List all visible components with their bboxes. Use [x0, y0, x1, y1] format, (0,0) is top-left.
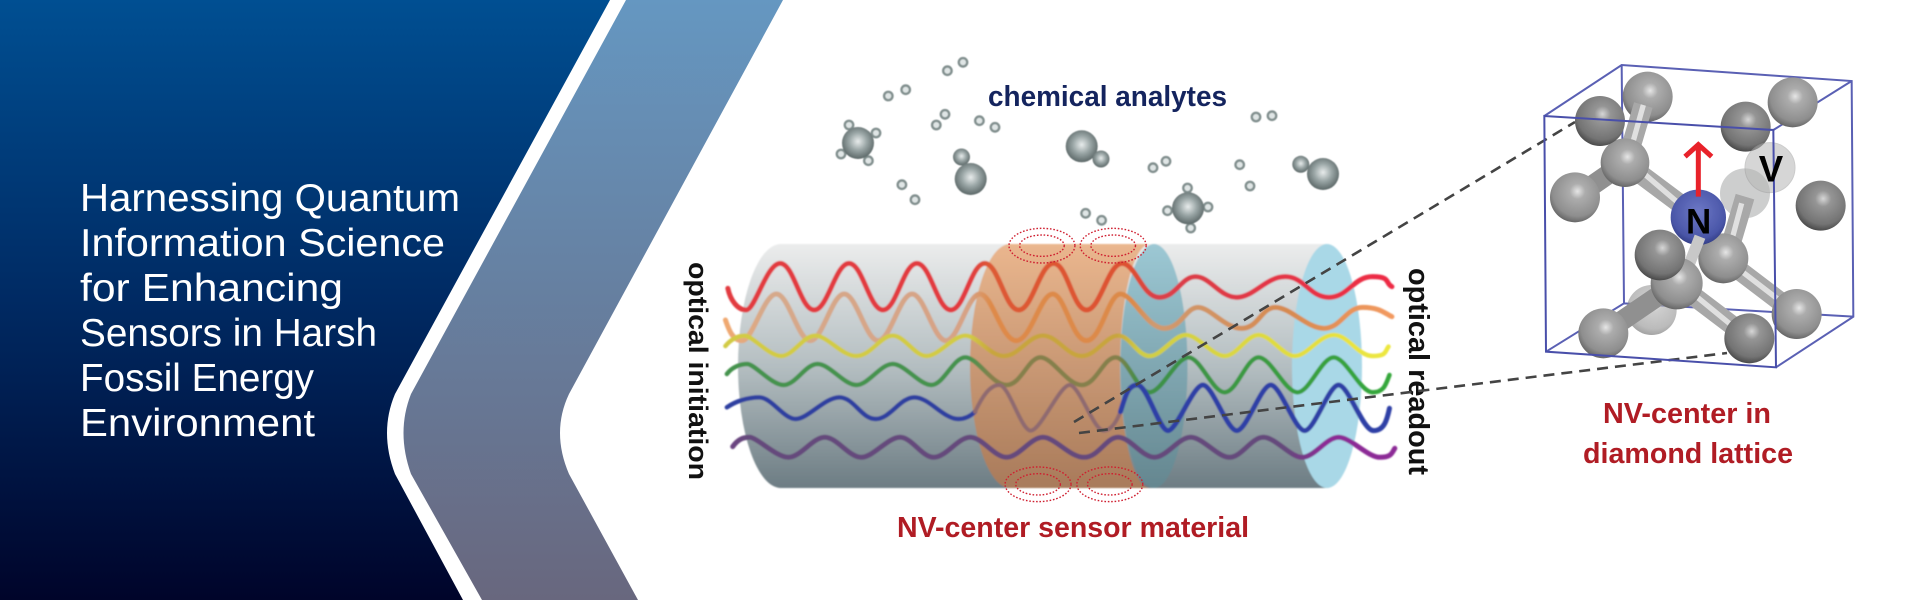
- title text: Fossil Energy: [80, 357, 314, 400]
- wave: orange: [725, 294, 1392, 341]
- cylinder end face: [1292, 244, 1362, 488]
- label: optical readout: optical readout: [1402, 268, 1434, 475]
- caption: NV-center in diamond lattice: [1583, 398, 1793, 470]
- light waves: [725, 263, 1395, 457]
- heading: chemical analytes: chemical analytes: [988, 81, 1227, 113]
- lattice box front edges: [1544, 116, 1776, 367]
- wave: red: [728, 263, 1392, 310]
- wave: blue left: [727, 397, 975, 419]
- diagram: diamond lattice unit cell: [1544, 65, 1853, 367]
- panel: steel blue chevron band: [404, 0, 783, 600]
- label: NV-center sensor material: NV-center sensor material: [897, 512, 1249, 544]
- caption: NV-center in diamond lattice: NV-center in: [1603, 398, 1771, 430]
- diagram: NV-center sensor cylinder: [725, 244, 1395, 488]
- bonds: [1575, 105, 1797, 338]
- title text: [80, 177, 460, 445]
- atom label V: V: [1759, 148, 1784, 189]
- title text: for Enhancing: [80, 267, 343, 310]
- wave: purple: [733, 437, 1395, 457]
- title text: Harnessing Quantum: [80, 177, 460, 220]
- wave: green: [727, 357, 1389, 392]
- wave: blue in band: [975, 385, 1120, 431]
- caption: NV-center in diamond lattice: diamond lattice: [1583, 438, 1793, 470]
- title text: Environment: [80, 402, 315, 445]
- magnetic field loops: [1005, 228, 1146, 502]
- molecules: chemical analyte particles: [837, 58, 1339, 232]
- atoms front: [1601, 138, 1649, 187]
- title text: Information Science: [80, 222, 445, 265]
- lattice box back edges: [1544, 65, 1853, 367]
- orange NV-center band: [970, 244, 1150, 488]
- teal cut face: [1120, 244, 1188, 488]
- label: optical initiation: optical initiation: [683, 262, 713, 480]
- title text: Sensors in Harsh: [80, 312, 377, 355]
- wave: yellow: [725, 335, 1389, 356]
- nitrogen atom: [1671, 190, 1726, 245]
- wave: blue right: [1120, 385, 1389, 431]
- dashed zoom lines: [1074, 122, 1727, 433]
- panel: dark blue title panel: [0, 0, 610, 600]
- atom label N: N: [1686, 202, 1711, 241]
- spin arrow: [1685, 145, 1712, 197]
- cylinder body: [738, 244, 1328, 488]
- vacancy site: [1745, 143, 1795, 193]
- atoms behind: [1623, 72, 1846, 335]
